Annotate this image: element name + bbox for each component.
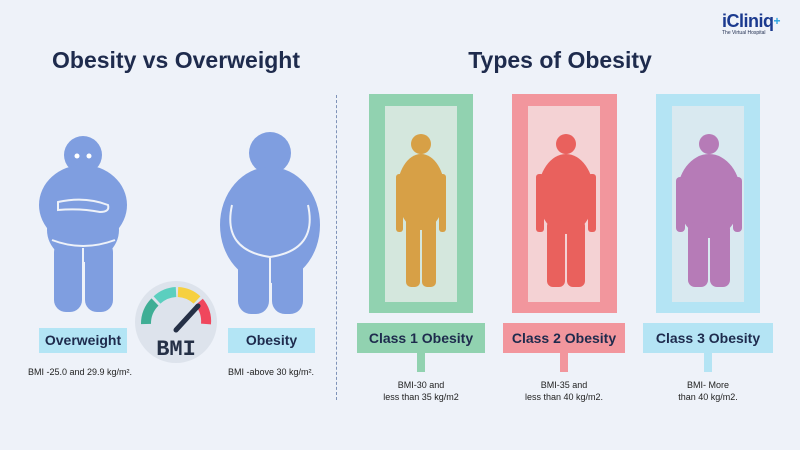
- logo: The Virtual Hospital: [722, 30, 766, 36]
- label: obesity: Obesity: [246, 332, 297, 348]
- panel: class 3: BMI- More: [687, 380, 729, 390]
- panel: class 2: [503, 94, 625, 402]
- text: obesity BMI: BMI -above 30 kg/m².: [228, 367, 314, 377]
- title: types of obesity: Types of Obesity: [468, 47, 652, 73]
- figure: [396, 134, 446, 287]
- logo: iCliniq+: [722, 11, 780, 31]
- panel: class 3: than 40 kg/m2.: [678, 392, 738, 402]
- text: less than 35 kg/m2: [383, 392, 459, 402]
- label: obesity: [228, 328, 315, 353]
- label: overweight: Overweight: [45, 332, 121, 348]
- icon: BMI gauge: [135, 281, 217, 363]
- panel: class 1: [357, 94, 485, 402]
- figure: [536, 134, 596, 287]
- text: BMI-30 and: [398, 380, 444, 390]
- icon: BMI gauge: BMI: [156, 337, 196, 362]
- divider: [336, 95, 337, 400]
- figure: obesity: [220, 132, 320, 314]
- panel: class 2: BMI-35 and: [541, 380, 587, 390]
- label: [357, 323, 485, 353]
- illustration: overweight & obesity figures with BMI gauge: [39, 132, 320, 363]
- text: [383, 380, 459, 402]
- panel: class 3: Class 3 Obesity: [656, 330, 760, 346]
- figure: [676, 134, 742, 287]
- label: Class 1 Obesity: [369, 330, 473, 346]
- label: overweight: [39, 328, 127, 353]
- text: overweight BMI: BMI -25.0 and 29.9 kg/m².: [28, 367, 132, 377]
- figure: overweight: [39, 136, 127, 312]
- frame: [369, 94, 473, 313]
- title: obesity vs overweight: Obesity vs Overweight: [52, 47, 300, 73]
- panel: class 3: [643, 94, 773, 402]
- panel: class 2: Class 2 Obesity: [512, 330, 616, 346]
- panel: class 2: less than 40 kg/m2.: [525, 392, 603, 402]
